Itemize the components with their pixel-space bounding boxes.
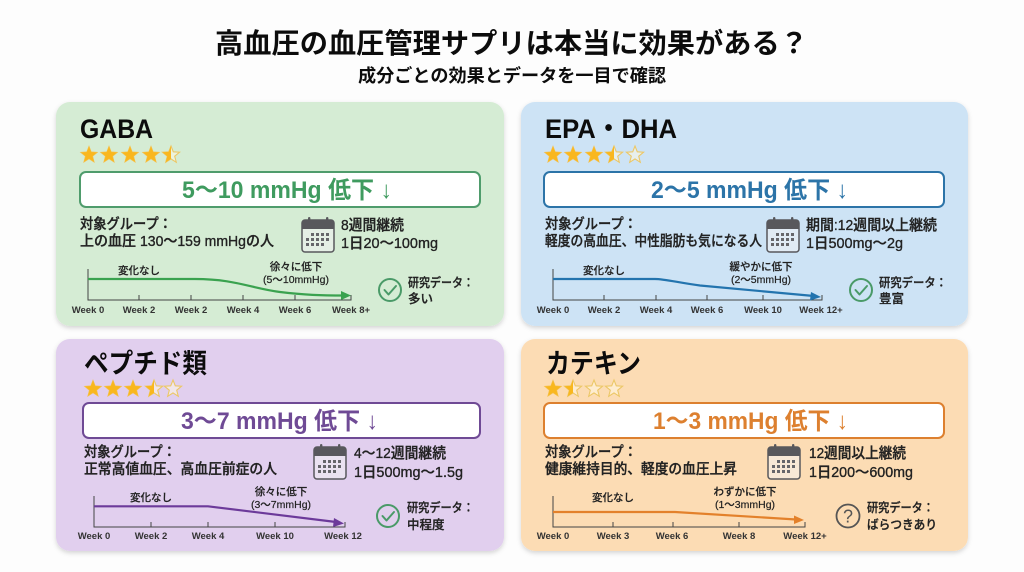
dosage: 1日500mg〜1.5g: [354, 464, 463, 481]
icon: check: [377, 505, 399, 527]
panel: EPA・DHA: [521, 102, 968, 326]
line chart: [537, 485, 827, 542]
research data: 多い: [408, 291, 433, 306]
research data: 研究データ：: [867, 500, 934, 515]
dosage: 12週間以上継続: [809, 444, 906, 462]
rating stars: 3.5 of 5: [84, 380, 182, 396]
target group: [84, 443, 277, 478]
effect box: [544, 403, 944, 438]
icon: calendar: [767, 217, 799, 252]
title: 高血圧の血圧管理サプリは本当に効果がある？: [215, 27, 808, 59]
target group: 対象グループ：: [545, 215, 637, 233]
research data: [879, 275, 947, 306]
research data: 中程度: [407, 517, 445, 532]
research data: [867, 500, 937, 532]
line chart: (3〜7mmHg): [251, 499, 311, 511]
line chart: (1〜3mmHg): [715, 499, 775, 511]
research data: 研究データ：: [879, 275, 947, 290]
icon: question: [836, 504, 860, 528]
rating stars: 4.5 of 5: [80, 146, 180, 162]
research data: 研究データ：: [408, 275, 474, 290]
line chart: Week 0: [537, 531, 569, 542]
line chart: Week 12+: [783, 531, 827, 542]
dosage: [341, 216, 438, 252]
panel: ペプチド類: [56, 339, 504, 551]
line chart: [537, 260, 843, 316]
effect box: [544, 172, 944, 207]
dosage: 4〜12週間継続: [354, 444, 446, 462]
effect box: [80, 172, 480, 207]
research data: [408, 275, 474, 306]
line chart: Week 0: [78, 531, 110, 542]
target group: 健康維持目的、軽度の血圧上昇: [545, 461, 737, 478]
research data: ばらつきあり: [867, 518, 937, 532]
line chart: Week 10: [256, 531, 294, 542]
dosage: [354, 444, 463, 481]
heading: ペプチド類: ペプチド類: [84, 349, 207, 379]
dosage: 8週間継続: [341, 216, 404, 234]
effect box: 3〜7 mmHg 低下 ↓: [181, 408, 378, 435]
line chart: Week 2: [588, 305, 620, 316]
target group: [80, 215, 274, 250]
heading: カテキン: カテキン: [546, 349, 641, 379]
line chart: Week 4: [227, 305, 260, 316]
rating stars: 3.5 of 5: [544, 146, 644, 162]
line chart: (2〜5mmHg): [731, 274, 791, 286]
icon: check: [850, 279, 872, 301]
dosage: [806, 216, 937, 252]
research data: 豊富: [879, 291, 904, 306]
line chart: (5〜10mmHg): [263, 274, 329, 286]
target group: [545, 215, 762, 250]
target group: [545, 443, 737, 478]
target group: 対象グループ：: [84, 443, 176, 461]
line chart: 緩やかに低下: [730, 260, 792, 273]
line chart: Week 2: [135, 531, 167, 542]
line chart: 変化なし: [583, 264, 625, 277]
line chart: Week 3: [597, 531, 629, 542]
panel: カテキン: [521, 339, 968, 551]
line chart: Week 6: [656, 531, 688, 542]
line chart: 変化なし: [592, 491, 634, 504]
effect box: 2〜5 mmHg 低下 ↓: [651, 177, 848, 204]
icon: calendar: [768, 444, 800, 479]
effect box: 5〜10 mmHg 低下 ↓: [182, 177, 392, 204]
heading: GABA: GABA: [80, 114, 153, 144]
heading: EPA・DHA: EPA・DHA: [545, 114, 677, 144]
icon: calendar: [302, 217, 334, 252]
line chart: Week 4: [640, 305, 673, 316]
research data: 研究データ：: [407, 500, 474, 515]
line chart: 変化なし: [130, 491, 172, 504]
panel: GABA: [56, 102, 504, 326]
subtitle: 成分ごとの効果とデータを一目で確認: [358, 65, 666, 86]
effect box: 1〜3 mmHg 低下 ↓: [653, 408, 848, 435]
line chart: Week 0: [72, 305, 104, 316]
effect box: [83, 403, 480, 438]
research data: [407, 500, 474, 532]
icon: check: [379, 279, 401, 301]
line chart: Week 4: [192, 531, 225, 542]
line chart: 変化なし: [118, 264, 160, 277]
line chart: Week 10: [744, 305, 782, 316]
rating stars: 1.5 of 4: [544, 380, 623, 396]
line chart: Week 12+: [799, 305, 843, 316]
line chart: 徐々に低下: [270, 260, 322, 273]
line chart: Week 8: [723, 531, 755, 542]
target group: 上の血圧 130〜159 mmHgの人: [80, 233, 274, 250]
line chart: 徐々に低下: [255, 485, 307, 498]
line chart: [72, 260, 371, 316]
line chart: Week 12: [324, 531, 362, 542]
target group: 軽度の高血圧、中性脂肪も気になる人: [545, 233, 762, 250]
dosage: 1日200〜600mg: [809, 464, 913, 481]
target group: 正常高値血圧、高血圧前症の人: [84, 461, 277, 478]
line chart: Week 6: [691, 305, 723, 316]
line chart: Week 2: [123, 305, 155, 316]
target group: 対象グループ：: [545, 443, 637, 461]
line chart: Week 0: [537, 305, 569, 316]
target group: 対象グループ：: [80, 215, 172, 233]
line chart: Week 6: [279, 305, 311, 316]
line chart: Week 8+: [332, 305, 371, 316]
line chart: Week 2: [175, 305, 207, 316]
line chart: わずかに低下: [714, 485, 776, 498]
line chart: [78, 485, 362, 542]
dosage: 期間:12週間以上継続: [806, 216, 937, 234]
dosage: 1日20〜100mg: [341, 235, 438, 252]
dosage: [809, 444, 913, 481]
dosage: 1日500mg〜2g: [806, 235, 903, 252]
icon: question: ?: [843, 506, 853, 526]
icon: calendar: [314, 444, 346, 479]
